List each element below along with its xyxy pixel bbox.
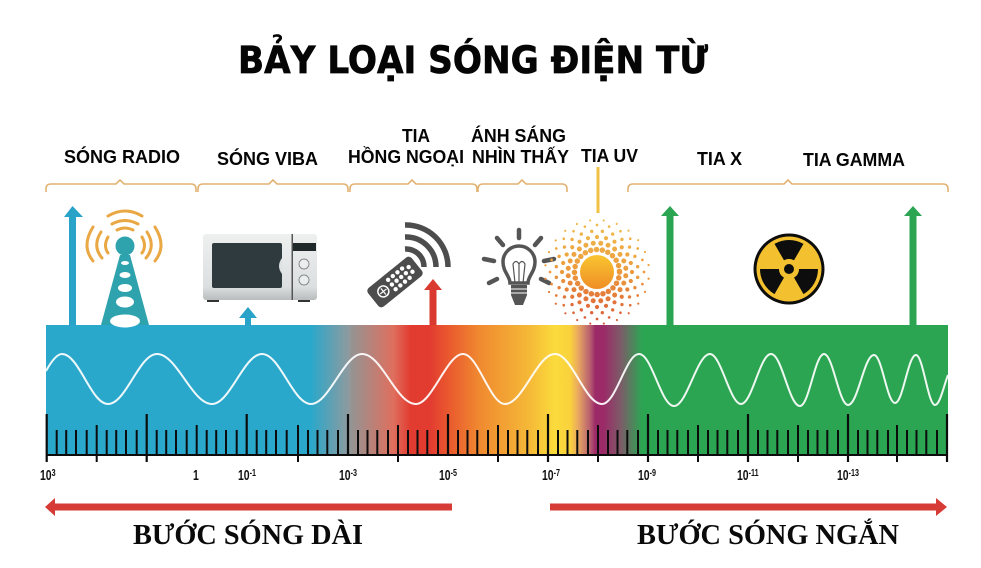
icon: light bulb bbox=[484, 230, 554, 305]
wavelength tick labels: -11 bbox=[749, 467, 759, 478]
wavelength tick labels bbox=[40, 467, 859, 483]
wavelength tick labels: 1 bbox=[193, 467, 199, 483]
label: short wavelength: BƯỚC SÓNG NGẮN bbox=[637, 519, 899, 551]
band labels bbox=[64, 125, 905, 170]
wavelength tick labels: 10 bbox=[339, 467, 351, 483]
wavelength tick labels: -9 bbox=[650, 467, 656, 478]
wavelength tick labels: 3 bbox=[52, 467, 56, 478]
arrow: microwave wavelength bbox=[239, 307, 257, 325]
icon: radio tower bbox=[87, 211, 161, 328]
icon: remote control bbox=[366, 225, 448, 309]
label: radio waves: SÓNG RADIO bbox=[64, 146, 180, 167]
label: visible light: ÁNH SÁNG bbox=[471, 125, 566, 146]
wavelength tick labels: -7 bbox=[554, 467, 560, 478]
arrow: infrared wavelength bbox=[424, 279, 442, 325]
icon: microwave bbox=[203, 234, 317, 302]
wavelength tick labels: 10 bbox=[638, 467, 650, 483]
spectrum band bbox=[46, 325, 948, 455]
line: UV pointer bbox=[596, 167, 600, 213]
label: long wavelength: BƯỚC SÓNG DÀI bbox=[133, 520, 363, 551]
label: infrared bbox=[348, 126, 464, 167]
label: X-ray: TIA X bbox=[697, 149, 742, 169]
wavelength tick labels: 10 bbox=[238, 467, 250, 483]
ruler scale bbox=[46, 414, 948, 462]
label: infrared: TIA bbox=[402, 126, 430, 146]
arrow: gamma wavelength bbox=[904, 206, 922, 325]
wavelength tick labels: -1 bbox=[250, 467, 256, 478]
wavelength tick labels: -3 bbox=[351, 467, 357, 478]
icon: radiation symbol bbox=[754, 234, 824, 304]
arrow: radio wavelength bbox=[64, 206, 83, 325]
wavelength tick labels: 10 bbox=[40, 467, 52, 483]
wavelength tick labels: 10 bbox=[837, 467, 849, 483]
label: infrared: HỒNG NGOẠI bbox=[348, 146, 464, 167]
icon: sun bbox=[539, 214, 655, 330]
wavelength tick labels: -5 bbox=[451, 467, 457, 478]
wavelength tick labels: 10 bbox=[737, 467, 749, 483]
arrow: long wavelength direction bbox=[45, 498, 452, 516]
wave bbox=[46, 354, 948, 406]
label: UV: TIA UV bbox=[581, 146, 638, 166]
wavelength tick labels: 10 bbox=[542, 467, 554, 483]
label: visible light bbox=[471, 125, 569, 167]
label: gamma: TIA GAMMA bbox=[803, 150, 905, 170]
title: BẢY LOẠI SÓNG ĐIỆN TỪ bbox=[238, 34, 708, 82]
arrow: short wavelength direction bbox=[550, 498, 947, 516]
arrow: X-ray wavelength bbox=[661, 206, 679, 325]
label: visible light: NHÌN THẤY bbox=[472, 146, 569, 167]
wavelength tick labels: 10 bbox=[439, 467, 451, 483]
wavelength tick labels: -13 bbox=[849, 467, 859, 478]
label: microwaves: SÓNG VIBA bbox=[217, 148, 318, 169]
brace brackets bbox=[46, 180, 948, 192]
